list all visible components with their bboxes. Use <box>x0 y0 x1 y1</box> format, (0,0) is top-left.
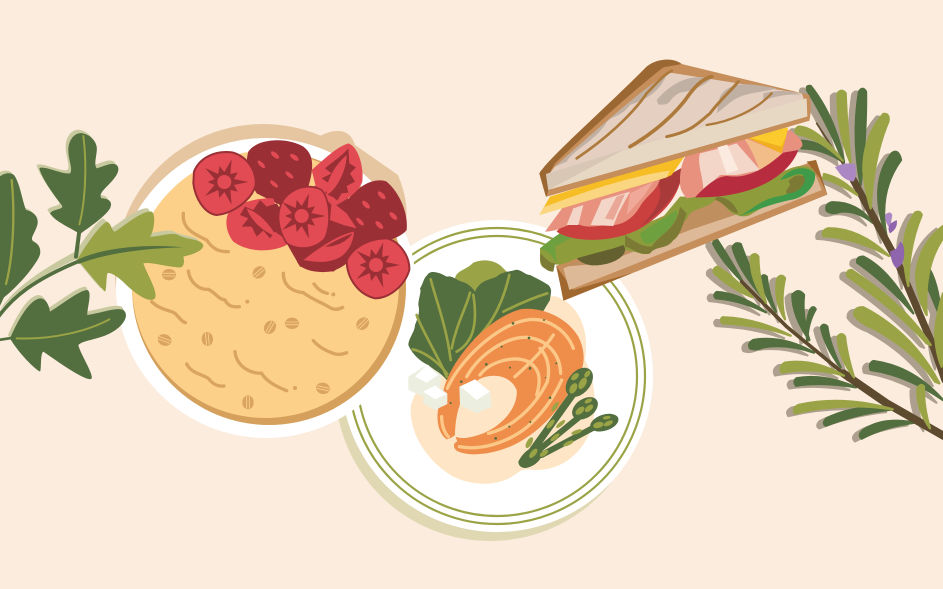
plate shadow <box>335 231 645 541</box>
salmon steak <box>437 309 584 454</box>
rosemary olive needles <box>714 91 943 428</box>
strawberry whole back <box>247 140 312 207</box>
tomato left <box>557 167 683 240</box>
strawberries <box>193 140 409 298</box>
rosemary stems <box>742 123 943 437</box>
top bread face <box>548 73 807 175</box>
lettuce veins <box>413 275 547 377</box>
oatmeal <box>132 151 399 418</box>
bowl white <box>116 138 416 438</box>
olive leaf midrib <box>77 246 183 264</box>
arugula stems <box>0 233 80 340</box>
salmon fat stripes <box>442 319 573 448</box>
oatmeal texture <box>152 213 372 409</box>
lettuce <box>540 166 815 272</box>
arugula midribs <box>6 136 109 339</box>
strawberry round slice left <box>193 152 256 215</box>
salmon hollow <box>455 376 517 438</box>
tomato right <box>695 150 798 197</box>
strawberry half slice lower <box>226 198 287 250</box>
bowl tan halo <box>115 124 411 420</box>
cheese left <box>539 153 687 215</box>
grill marks <box>577 71 772 158</box>
top bread crumb shading <box>555 74 801 167</box>
strawberry whole right <box>345 180 407 243</box>
bacon right <box>680 130 802 198</box>
dinner plate <box>341 220 653 532</box>
strawberry round slice center <box>279 187 329 248</box>
strawberry half slice lower right <box>297 202 363 272</box>
top bread side <box>546 98 807 190</box>
strawberry half slice top right <box>312 143 363 207</box>
asparagus <box>518 362 621 468</box>
arugula olive leaf <box>77 212 203 300</box>
oatmeal bowl <box>115 124 416 438</box>
bottom bread <box>556 160 827 301</box>
cheese right <box>743 127 788 153</box>
rosemary dark needles <box>713 86 943 439</box>
rosemary sprigs <box>707 86 943 441</box>
bacon left <box>545 178 660 232</box>
strawberry seeds <box>256 150 399 230</box>
back lettuce <box>455 260 523 307</box>
top bread <box>539 60 811 197</box>
rosemary shadow <box>707 89 936 441</box>
pepper specks <box>450 319 557 440</box>
dark lettuce leaf <box>408 270 551 380</box>
rosemary purple buds <box>835 163 904 268</box>
arugula sprig <box>0 130 203 379</box>
bowl rim <box>132 151 406 425</box>
feta cubes <box>408 365 492 413</box>
cream sauce <box>411 296 595 484</box>
salmon dish <box>408 260 621 484</box>
strawberry dark centre mass <box>280 183 367 272</box>
arugula leaf shadows <box>0 130 199 376</box>
strawberry round slice right <box>347 238 409 298</box>
arugula dark leaves <box>0 133 126 379</box>
sandwich <box>539 60 827 301</box>
